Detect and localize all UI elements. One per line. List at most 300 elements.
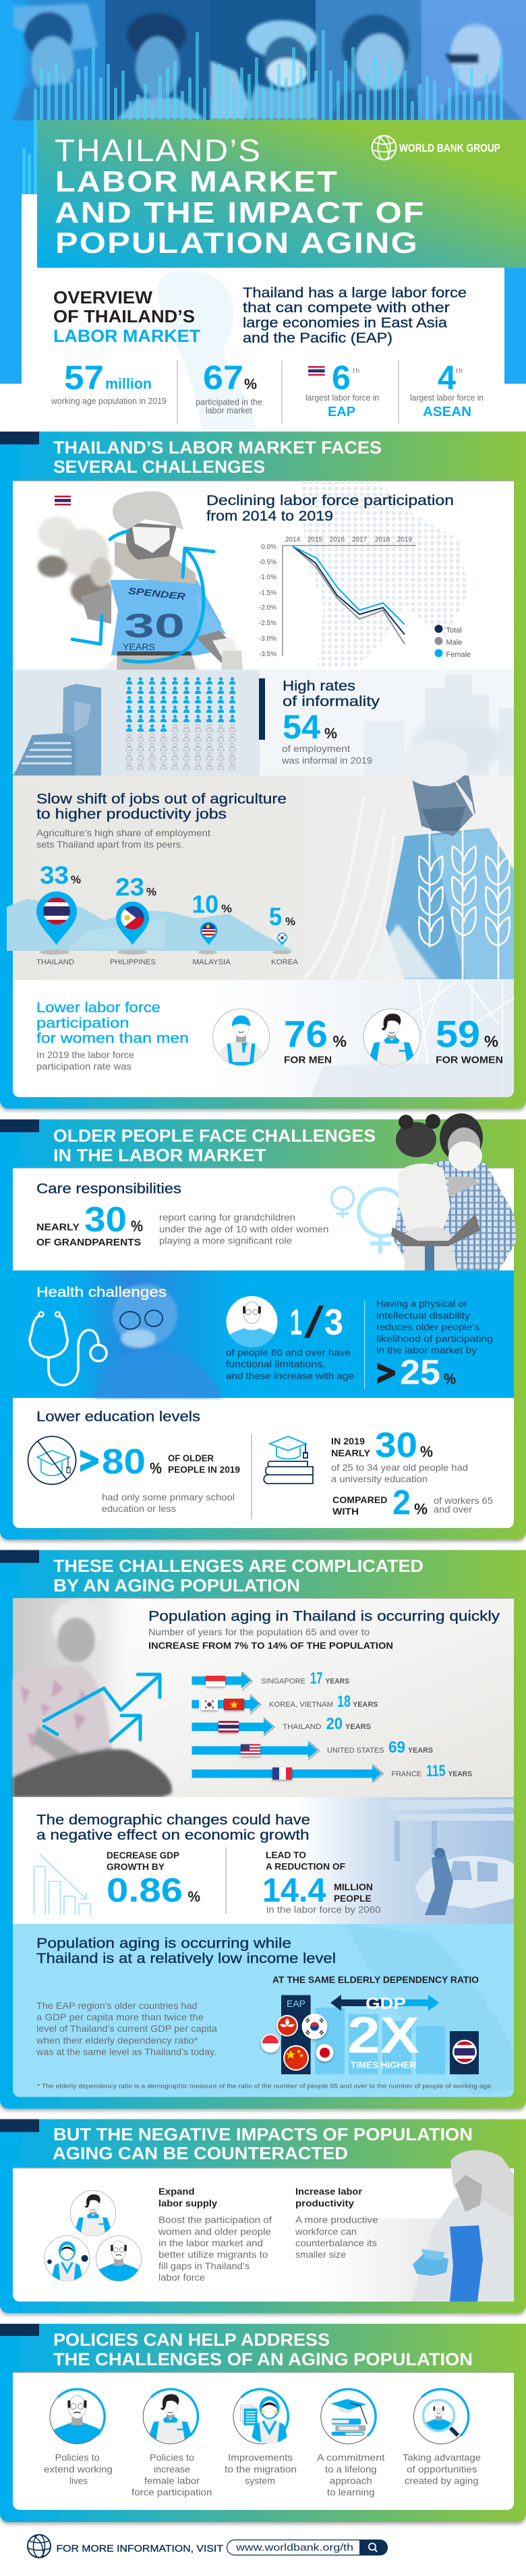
chart title [206, 493, 454, 524]
informality text: High rates [283, 678, 355, 694]
stat: 59% for women: 59 [436, 1013, 480, 1055]
map pin: Malaysia 10%: % [221, 902, 232, 915]
policy 1: extend working lives: lives [69, 2475, 88, 2486]
map pin: Malaysia 10%: 10 [192, 890, 218, 918]
stat: 59% for women: % [484, 1033, 498, 1051]
section 3 heading [53, 1556, 423, 1596]
policy 4: lifelong learning: A commitment [317, 2452, 385, 2463]
stat: labor force reduction [262, 1849, 381, 1915]
stat: more than 25 percent [376, 1298, 493, 1393]
search box [227, 2540, 388, 2556]
stat: 59% for women: FOR WOMEN [436, 1055, 503, 1066]
expand labor supply text: Boost the participation of [158, 2215, 272, 2225]
panel: lower education levels [28, 1409, 493, 1523]
stat: 59% for women [436, 1013, 503, 1066]
footer [28, 2535, 388, 2558]
line chart: labor force participation: -2.5% [259, 620, 276, 627]
policy 4: lifelong learning: to a lifelong [325, 2463, 377, 2474]
stat: 30 percent university: NEARLY [331, 1447, 371, 1458]
line chart: labor force participation: 2017 [352, 536, 368, 544]
increase labor productivity text: A more productive [295, 2215, 378, 2225]
icon: wheat [419, 829, 510, 979]
stat: GDP growth decrease: DECREASE GDP [107, 1850, 179, 1861]
map pin: Thailand 33%: % [71, 873, 81, 886]
section 5 heading [53, 2330, 473, 2370]
panel: health challenges [13, 1270, 514, 1398]
stat: one third: 3 [324, 1302, 343, 1343]
photo: car factory [297, 1797, 514, 1924]
arrow: Korea and Vietnam 18 years: YEARS [353, 1701, 378, 1709]
map pin: Korea 5%: KOREA [271, 958, 299, 966]
stat: more than 25 percent: in the labor market by [376, 1345, 477, 1355]
increase labor productivity text: counterbalance its [295, 2237, 377, 2248]
increase labor productivity text: productivity [295, 2198, 354, 2208]
map pin: Philippines 23%: PHILIPPINES [110, 958, 156, 966]
stat: one third: functional limitations, [226, 1359, 325, 1370]
chart legend [434, 624, 471, 659]
icon: graduation cap and books [264, 1436, 313, 1484]
stat: GDP growth decrease: 0.86 [107, 1871, 183, 1909]
care responsibilities: % [131, 1217, 143, 1235]
population aging text: INCREASE FROM 7% TO 14% OF THE POPULATION [148, 1640, 393, 1651]
faint map background [158, 270, 256, 429]
stat: over 80 percent [80, 1442, 240, 1514]
policy 3: migration system: Improvements [228, 2452, 293, 2463]
overview heading [53, 287, 200, 346]
policy 2: female participation: Policies to [150, 2452, 194, 2463]
stat: 30 percent university [331, 1426, 468, 1484]
title text: THAILAND’S [55, 133, 262, 168]
stat: more than 25 percent: 25 [400, 1353, 440, 1393]
stat: 76% for men: % [333, 1033, 347, 1051]
expand labor supply text: women and older people [158, 2226, 271, 2237]
care responsibilities: playing a more significant role [159, 1235, 292, 1246]
chart title: from 2014 to 2019 [206, 508, 333, 524]
panel: overview [51, 270, 484, 429]
flag circle: Thailand [452, 2040, 477, 2064]
stat: GDP growth decrease: GROWTH BY [107, 1861, 165, 1872]
title text: POPULATION AGING [55, 227, 419, 260]
women vs men text [36, 1000, 189, 1072]
people icons: labor supply [45, 2190, 142, 2282]
section 4 heading: AGING CAN BE COUNTERACTED [53, 2143, 348, 2163]
building photo [13, 684, 101, 775]
line chart: labor force participation [259, 536, 416, 658]
chart: GDP comparison: EAP [287, 1998, 305, 2009]
panel: health challenges: Health challenges [36, 1285, 167, 1300]
stat: over 80 percent: 80 [102, 1442, 146, 1482]
photo: farmer with flowers: YEARS [123, 641, 155, 652]
chart: GDP comparison: AT THE SAME ELDERLY DEPENDENCY RATIO [272, 1974, 479, 1985]
panel: section 3 aging population [0, 1550, 526, 2109]
arrow: Korea and Vietnam 18 years: KOREA, VIETNAM [269, 1701, 333, 1709]
map pin: Philippines 23%: % [146, 885, 156, 898]
agriculture text: Agriculture’s high share of employment [36, 827, 210, 838]
stat: more than 25 percent: Having a physical or [376, 1298, 467, 1309]
panel: population aging speed [13, 1598, 514, 1797]
stat: one third [226, 1302, 354, 1381]
line chart: labor force participation: -1.0% [259, 574, 276, 581]
stat: over 80 percent: % [150, 1459, 162, 1477]
map pin: Philippines 23% [110, 873, 156, 966]
arrow: Thailand 20 years: YEARS [345, 1723, 371, 1731]
section 5 heading: THE CHALLENGES OF AN AGING POPULATION [53, 2349, 473, 2370]
low income text: The EAP region’s older countries had [36, 2000, 197, 2011]
arrow: United States 69 years [192, 1738, 433, 1760]
panel: agriculture [7, 740, 514, 980]
care responsibilities: NEARLY [36, 1222, 80, 1233]
panel: section 5 policies [0, 2324, 526, 2522]
stat: labor force reduction: MILLION [334, 1881, 373, 1892]
care responsibilities: under the age of 10 with older women [159, 1223, 329, 1234]
line chart: labor force participation: 0.0% [261, 544, 276, 551]
overview statement: and the Pacific (EAP) [243, 330, 392, 346]
care responsibilities: 30 [84, 1200, 127, 1239]
stat: GDP growth decrease [107, 1850, 200, 1909]
expand labor supply text: labor force [158, 2272, 205, 2283]
line chart: labor force participation: 2019 [397, 536, 413, 544]
expand labor supply text: Expand [158, 2186, 194, 2197]
women vs men text: participation [36, 1016, 129, 1031]
low income text: Population aging is occurring while [36, 1935, 291, 1951]
stat: 6th in EAP [305, 359, 379, 419]
low income text: was at the same level as Thailand’s today. [36, 2047, 216, 2057]
population aging text [148, 1609, 500, 1651]
stat: 57 million: million [105, 375, 152, 392]
line chart: labor force participation: -1.5% [259, 589, 276, 597]
photo: older man [94, 1284, 223, 1398]
stat: more than 25 percent: likelihood of participating [376, 1333, 493, 1344]
arrow: Korea and Vietnam 18 years: 18 [337, 1693, 351, 1711]
pictogram: 54 of 100 people [126, 677, 235, 769]
stat: labor force reduction: A REDUCTION OF [266, 1861, 345, 1872]
stat: one third: and these increase with age [226, 1370, 354, 1381]
chart legend: Total [446, 626, 462, 635]
population aging text: Number of years for the population 65 and over to [148, 1627, 370, 1637]
stat: more than 25 percent: % [444, 1370, 456, 1388]
chart legend: Male [446, 639, 462, 647]
stat: over 80 percent: had only some primary school [102, 1492, 235, 1502]
low income text: a GDP per capita more than twice the [36, 2012, 204, 2022]
women vs men text: participation rate was [36, 1061, 132, 1072]
care responsibilities [36, 1181, 329, 1248]
panel: economic growth effect [13, 1797, 514, 1924]
policy 5: opportunities from aging [403, 2389, 481, 2486]
stat: 4th in ASEAN [410, 359, 484, 419]
section 1 heading [53, 438, 382, 477]
arrow: France 115 years [192, 1762, 472, 1783]
stat: more than 25 percent: reduces older people’s [376, 1322, 479, 1333]
landscape [7, 899, 293, 951]
section 5 heading: POLICIES CAN HELP ADDRESS [53, 2330, 330, 2350]
map pin: Korea 5%: % [285, 915, 295, 928]
photo: elderly woman [13, 1598, 172, 1797]
policy 2: female participation: increase [154, 2463, 190, 2474]
women vs men text: Lower labor force [36, 1000, 160, 1016]
agriculture text: sets Thailand apart from its peers. [36, 839, 183, 850]
stat: over 80 percent: PEOPLE IN 2019 [168, 1465, 240, 1475]
stat: labor force reduction: 14.4 [262, 1871, 326, 1909]
increase labor productivity text: workforce can [295, 2226, 357, 2237]
policy 3: migration system [225, 2389, 297, 2486]
section 3 heading: THESE CHALLENGES ARE COMPLICATED [53, 1556, 423, 1576]
line chart: labor force participation: -3.5% [259, 651, 276, 658]
stat: 2 percent workers: WITH [332, 1506, 359, 1517]
stat: 30 percent university: IN 2019 [331, 1436, 365, 1446]
section 3 heading: BY AN AGING POPULATION [53, 1575, 300, 1596]
line chart: labor force participation: -2.0% [259, 604, 276, 612]
stat: one third: 1 [290, 1302, 302, 1343]
informality text: of informality [283, 694, 380, 709]
stat: labor force reduction: LEAD TO [266, 1849, 306, 1860]
chart legend: Female [446, 651, 471, 659]
low income text: when their elderly dependency ratio* [36, 2035, 198, 2045]
title text: AND THE IMPACT OF [55, 196, 426, 229]
icon: no education [28, 1436, 76, 1484]
icon: older man portrait [227, 1296, 278, 1349]
title banner [37, 120, 526, 268]
agriculture text: to higher productivity jobs [36, 807, 227, 822]
stat: 2 percent workers: 2 [392, 1484, 411, 1523]
chart: GDP comparison [261, 1974, 479, 2074]
arrow: Thailand 20 years: 20 [326, 1715, 343, 1733]
low income text: level of Thailand’s current GDP per capita [36, 2023, 217, 2034]
flag: Thailand [55, 496, 71, 505]
stat: 67 percent [196, 359, 262, 415]
title text: LABOR MARKET [55, 165, 339, 198]
line chart: labor force participation: -3.0% [259, 635, 276, 643]
expand labor supply text: in the labor market and [158, 2237, 263, 2248]
stat: 2 percent workers [332, 1484, 493, 1523]
policy 1: extend working lives [44, 2389, 113, 2486]
stat: 67 percent: 67 [203, 359, 243, 397]
policy 4: lifelong learning: approach [330, 2475, 372, 2486]
photo: rice farmer [303, 740, 514, 979]
panel: section 2 older people [0, 1113, 526, 1540]
stat: 6th in EAP: EAP [328, 405, 355, 419]
stat: 30 percent university: % [420, 1443, 433, 1461]
stat: more than 25 percent: intellectual disability [376, 1310, 470, 1320]
chart: GDP comparison: TIMES HIGHER [351, 2059, 416, 2070]
care responsibilities: report caring for grandchildren [159, 1212, 295, 1223]
growth text: a negative effect on economic growth [36, 1827, 310, 1843]
policy 1: extend working lives: extend working [44, 2463, 113, 2474]
policy 2: female participation [132, 2389, 212, 2498]
arrow: Thailand 20 years [192, 1715, 371, 1736]
line chart: labor force participation: -0.5% [259, 559, 276, 566]
panel: section 1 labor market challenges [0, 432, 526, 1109]
icon: male worker [213, 1009, 270, 1067]
low income text [36, 1935, 336, 2057]
section 2 heading: IN THE LABOR MARKET [53, 1145, 266, 1165]
stat: 67 percent: % [244, 376, 257, 392]
chart title: Declining labor force participation [206, 493, 454, 508]
policy 5: opportunities from aging: Taking advantage [403, 2452, 481, 2463]
arrow: Singapore 17 years: SINGAPORE [261, 1678, 305, 1686]
section 2 heading [53, 1125, 376, 1165]
overview statement: that can compete with other [243, 300, 450, 316]
arrow: France 115 years: YEARS [448, 1770, 472, 1778]
growth text: The demographic changes could have [36, 1813, 310, 1828]
icon: World Bank globe [28, 2535, 51, 2558]
stat: labor force reduction: PEOPLE [334, 1893, 372, 1904]
line chart: labor force participation: 2016 [330, 536, 345, 544]
stat: 4th in ASEAN: largest labor force in [410, 392, 484, 403]
footer: FOR MORE INFORMATION, VISIT [57, 2543, 223, 2554]
policy 2: female participation: female labor [144, 2475, 200, 2486]
arrow: United States 69 years: 69 [388, 1738, 405, 1757]
section 4 heading [53, 2124, 473, 2163]
arrow: France 115 years: 115 [426, 1762, 445, 1780]
search box: www.worldbank.org/th [235, 2542, 353, 2554]
stat: 57 million: 57 [64, 359, 104, 397]
map pin: Korea 5% [269, 903, 299, 966]
stat: 2 percent workers: and over [434, 1504, 472, 1515]
chart: GDP comparison: GDP [366, 1995, 406, 2013]
arrow: Singapore 17 years: YEARS [325, 1678, 349, 1686]
World Bank Group logo: WORLD BANK GROUP [399, 142, 500, 154]
icon: female symbols [332, 1187, 406, 1254]
line chart: labor force participation: 2014 [285, 536, 301, 544]
stat: 30 percent university: a university education [331, 1473, 428, 1484]
growth text [36, 1813, 310, 1843]
map pin: Korea 5%: 5 [269, 903, 282, 931]
panel: low income level [13, 1924, 514, 2097]
informality text: of employment [282, 743, 350, 754]
care responsibilities: OF GRANDPARENTS [36, 1237, 141, 1248]
photo: grandmother carrying child [391, 1113, 517, 1270]
arrow: Singapore 17 years [192, 1670, 349, 1691]
policy 1: extend working lives: Policies to [55, 2452, 100, 2463]
arrow: France 115 years: FRANCE [391, 1770, 421, 1778]
stat: 30 percent university: 30 [375, 1426, 417, 1465]
icon: declining bars [34, 1854, 90, 1914]
panel: informality [13, 670, 514, 775]
stat: 57 million [51, 359, 167, 406]
icon: rising trend arrows [44, 1674, 160, 1741]
map pin: Thailand 33%: 33 [40, 862, 69, 889]
hero: photo strip [0, 0, 526, 384]
arrow: United States 69 years: YEARS [408, 1747, 433, 1755]
women vs men text: for women than men [36, 1030, 189, 1046]
stat: 76% for men: FOR MEN [284, 1055, 332, 1066]
map pin: Malaysia 10%: MALAYSIA [193, 958, 231, 966]
overview heading: OVERVIEW [53, 287, 152, 308]
overview heading: OF THAILAND’S [53, 306, 195, 326]
stat: one third: of people 60 and over have [226, 1347, 351, 1358]
increase labor productivity text: Increase labor [295, 2186, 363, 2197]
population aging text: Population aging in Thailand is occurring quickly [148, 1609, 500, 1624]
informality text [281, 678, 380, 766]
chart: GDP comparison: 2X [347, 2007, 419, 2064]
title text [55, 133, 426, 260]
low income text: Thailand is at a relatively low income level [36, 1951, 336, 1966]
footnote: * The elderly dependency ratio is a demographic measure of the ratio of the number of people 65 and over to the number of people of working age. [37, 2082, 493, 2090]
photo: protected factory worker [317, 2150, 514, 2302]
section 2 heading: OLDER PEOPLE FACE CHALLENGES [53, 1125, 376, 1146]
expand labor supply text [158, 2186, 272, 2283]
panel: women versus men participation [36, 980, 514, 1097]
line chart: labor force participation: 2015 [308, 536, 323, 544]
stat: 6th in EAP: largest labor force in [305, 392, 379, 403]
map pin: Thailand 33%: THAILAND [36, 958, 74, 966]
icon: female worker [363, 1009, 420, 1067]
policy 4: lifelong learning [317, 2389, 385, 2498]
World Bank Group logo [372, 136, 500, 160]
stat: 67 percent: participated in the [196, 397, 262, 407]
icon: circular arrows [72, 531, 214, 662]
arrow: Korea and Vietnam 18 years [192, 1693, 378, 1714]
photo: farmer with flowers [38, 492, 243, 670]
agriculture text: Slow shift of jobs out of agriculture [36, 792, 287, 807]
stat: 4th in ASEAN: 4 [438, 359, 456, 397]
expand labor supply text: fill gaps in Thailand’s [158, 2260, 250, 2271]
stat: 67 percent: labor market [206, 405, 252, 415]
policy 3: migration system: system [245, 2475, 275, 2486]
informality text: 54 [283, 708, 320, 746]
flag circles: EAP economies [261, 2014, 333, 2071]
informality text: % [324, 725, 337, 742]
women vs men text: In 2019 the labor force [36, 1049, 134, 1060]
stat: labor force reduction: in the labor force by 2060 [266, 1904, 381, 1915]
arrow: Thailand 20 years: THAILAND [283, 1723, 322, 1731]
section 1 heading: SEVERAL CHALLENGES [53, 457, 265, 477]
policy 2: female participation: force participation [132, 2487, 212, 2498]
informality text: was informal in 2019 [281, 755, 372, 766]
agriculture text [36, 792, 287, 850]
map pin: Philippines 23%: 23 [115, 873, 144, 901]
icon: stethoscope [30, 1312, 107, 1385]
policy 4: lifelong learning: to learning [327, 2487, 375, 2498]
increase labor productivity text [295, 2186, 378, 2260]
arrow: United States 69 years: UNITED STATES [327, 1747, 384, 1755]
stat: GDP growth decrease: % [187, 1888, 200, 1905]
expand labor supply text: better utilize migrants to [158, 2249, 268, 2260]
map pin: Thailand 33% [36, 862, 81, 966]
hero: bar chart overlay [22, 30, 503, 194]
arrow: Singapore 17 years: 17 [310, 1670, 322, 1687]
panel: section 4 counteracting [0, 2119, 526, 2313]
policy 5: opportunities from aging: created by aging [405, 2475, 479, 2486]
photo: farmer with flowers: SPENDER [127, 585, 187, 602]
overview statement [243, 285, 467, 346]
stat: 2 percent workers: % [414, 1500, 428, 1518]
stat: 57 million: working age population in 2019 [51, 396, 167, 406]
stat: 2 percent workers: COMPARED [332, 1494, 387, 1505]
policy 5: opportunities from aging: of opportunities [407, 2463, 477, 2474]
stat: 76% for men [284, 1013, 347, 1066]
increase labor productivity text: smaller size [295, 2249, 346, 2260]
stat: 30 percent university: of 25 to 34 year old people had [331, 1462, 468, 1473]
stat: 4th in ASEAN: ASEAN [423, 405, 471, 419]
stat: 6th in EAP: 6 [332, 359, 351, 397]
policy 3: migration system: to the migration [225, 2463, 297, 2474]
stat: over 80 percent: OF OLDER [168, 1453, 214, 1463]
map pin: Malaysia 10% [193, 896, 232, 964]
panel: lower education levels: Lower education levels [36, 1409, 200, 1425]
care responsibilities: Care responsibilities [36, 1181, 181, 1197]
expand labor supply text: labor supply [158, 2198, 217, 2208]
overview heading: LABOR MARKET [53, 326, 200, 346]
stat: 2 percent workers: of workers 65 [434, 1495, 493, 1506]
photo: farmer with flowers: 30 [124, 607, 185, 645]
overview statement: Thailand has a large labor force [243, 285, 467, 301]
section 4 heading: BUT THE NEGATIVE IMPACTS OF POPULATION [53, 2124, 473, 2144]
overview statement: large economies in East Asia [243, 316, 447, 330]
section 1 heading: THAILAND’S LABOR MARKET FACES [53, 438, 382, 458]
stat: 4th in ASEAN: th [456, 368, 463, 375]
stat: over 80 percent: education or less [102, 1503, 176, 1514]
